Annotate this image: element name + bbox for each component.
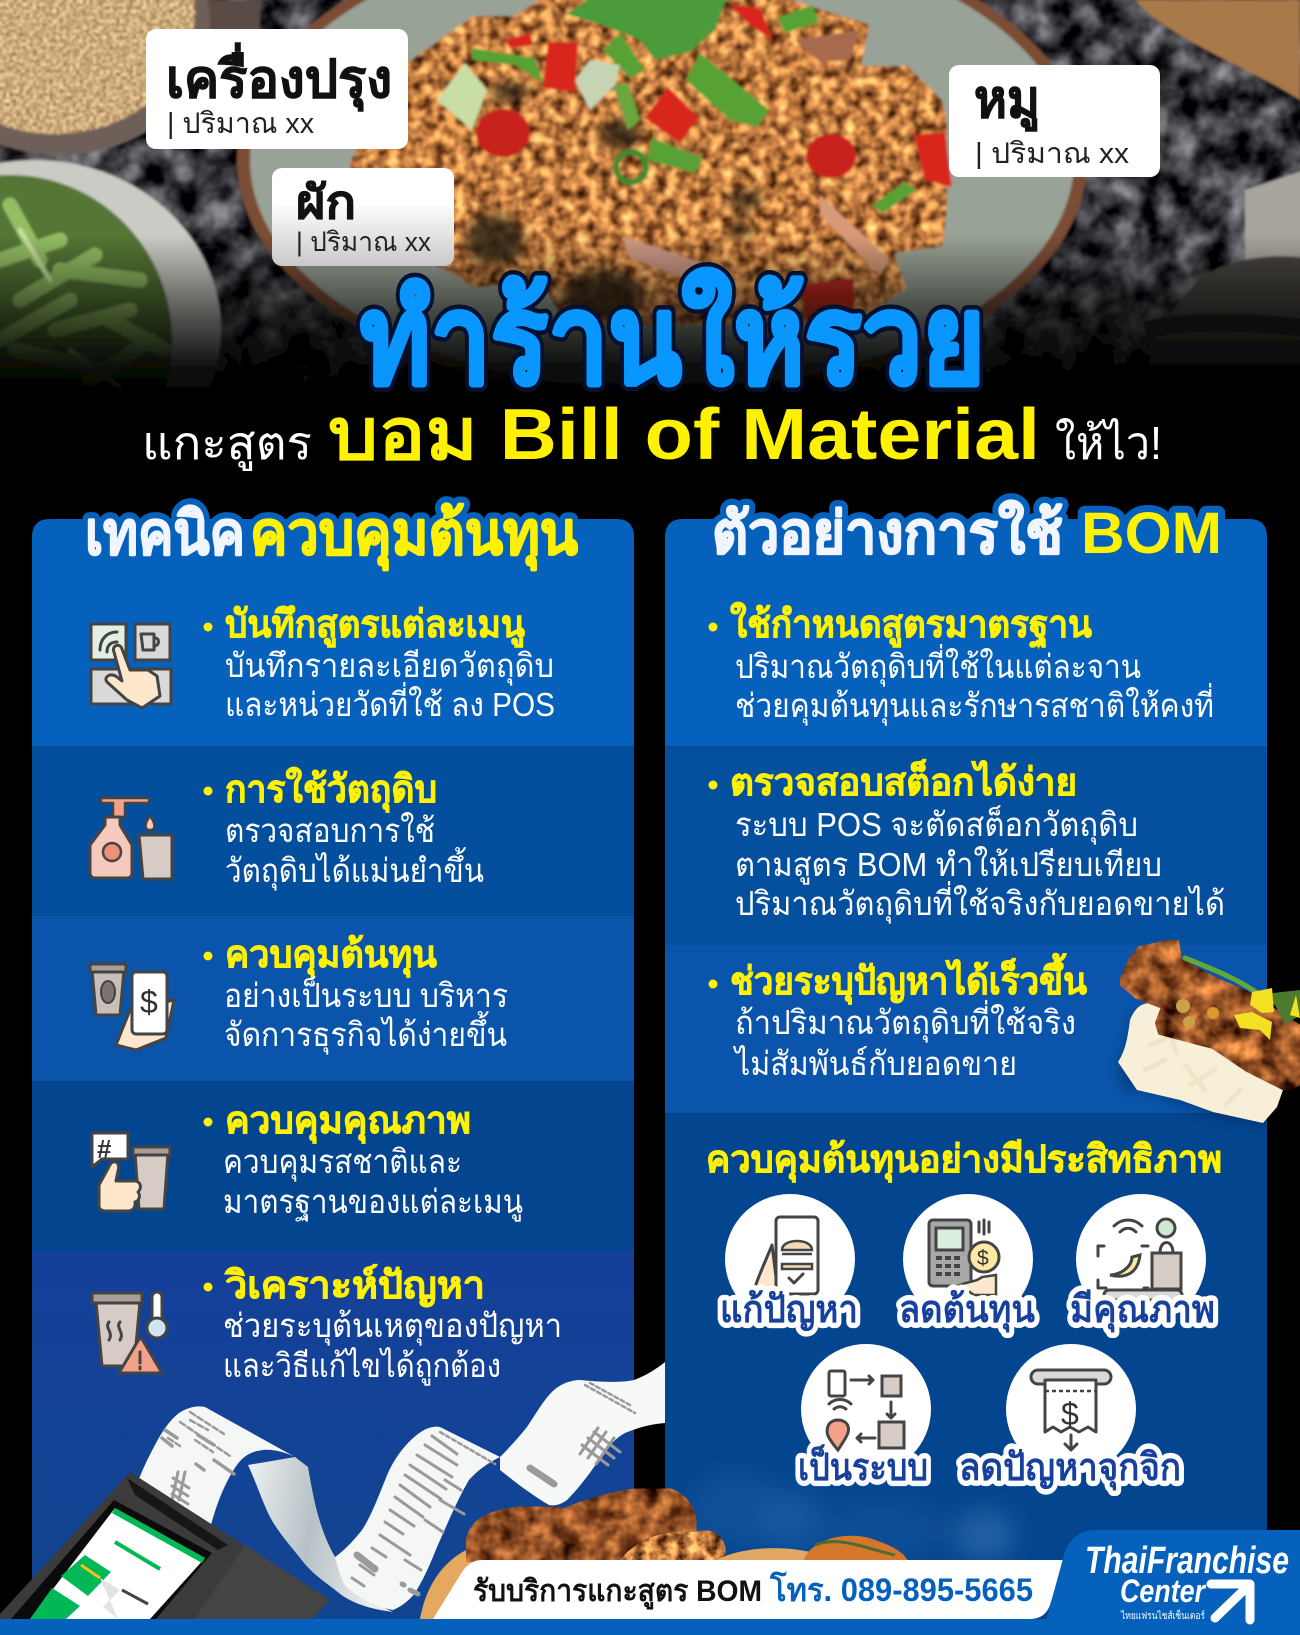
item: record recipes: บันทึกรายละเอียดวัตถุดิบ: [225, 647, 554, 686]
hero food photo: [0, 0, 1300, 388]
icon: thumbs up and cup: [92, 1133, 170, 1211]
subtitle: บอม Bill of Material: [328, 395, 1040, 475]
item: ingredient usage: ตรวจสอบการใช้: [225, 812, 435, 849]
lettuce: [566, 0, 728, 60]
item: ingredient usage: วัตถุดิบได้แม่นยำขึ้น: [225, 847, 484, 891]
item: identify problems faster: ถ้าปริมาณวัตถุดิบที่ใช้จริง: [735, 1000, 1076, 1043]
right heading: [712, 499, 1222, 566]
right heading: ตัวอย่างการใช้: [712, 499, 1063, 566]
ingredient label: pork: | ปริมาณ xx: [975, 138, 1130, 170]
item: cost control: ควบคุมต้นทุน: [225, 934, 437, 978]
item: problem analysis: และวิธีแก้ไขได้ถูกต้อง: [223, 1347, 501, 1386]
benefit: reduce costs: ลดต้นทุน: [899, 1289, 1035, 1333]
item: quality control: ควบคุมรสชาติและ: [223, 1143, 462, 1182]
subtitle: ให้ไว!: [1055, 417, 1162, 469]
ingredient label: pork: หมู: [974, 71, 1040, 132]
item: problem analysis: [92, 1264, 562, 1386]
ingredient label: seasoning: [146, 29, 408, 149]
icon: payment terminal with coin: $: [977, 1247, 989, 1270]
icon: logo arrow: [1211, 1584, 1250, 1620]
benefit: reduce small problems: ลดปัญหาจุกจิก: [959, 1447, 1181, 1491]
POS payment terminal: [0, 1472, 330, 1619]
ingredient label: seasoning: เครื่องปรุง: [166, 43, 392, 112]
dark gaps in meat: [465, 82, 763, 320]
item: standard recipe: ปริมาณวัตถุดิบที่ใช้ในแต่ละจาน: [735, 644, 1141, 687]
item: identify problems faster: [708, 953, 1087, 1082]
minced pork: [350, 0, 947, 325]
left heading: เทคนิค: [85, 500, 245, 567]
item: easy stock check: ตรวจสอบสต็อกได้ง่าย: [730, 759, 1077, 804]
logo: ThaiFranchise Center: [1042, 1530, 1300, 1635]
bullet: [204, 786, 212, 796]
right heading: BOM: [1081, 501, 1222, 566]
panel background rows: [32, 519, 634, 1619]
bowl of ground rice: [0, 0, 260, 155]
benefit: reduce small problems: [959, 1344, 1181, 1491]
photo: pork on sticky rice: [1118, 940, 1300, 1124]
left heading: เทคนิค: [85, 500, 245, 567]
icon: coffee cup and phone payment: $: [140, 984, 158, 1020]
benefit: quality: มีคุณภาพ: [1070, 1289, 1215, 1333]
pepper shaker right: [1140, 165, 1300, 425]
benefit: solve problems: [720, 1194, 858, 1331]
pink onion slices: [622, 30, 890, 280]
item: record recipes: บันทึกสูตรแต่ละเมนู: [225, 604, 525, 648]
item: standard recipe: ช่วยคุมต้นทุนและรักษารสชาติให้คงที่: [735, 683, 1214, 726]
right heading: BOM: [1081, 501, 1222, 566]
benefit: quality: [1070, 1194, 1215, 1333]
item: identify problems faster: ช่วยระบุปัญหาได้เร็วขึ้น: [730, 953, 1087, 1005]
subtitle: แกะสูตร: [142, 417, 312, 471]
main title: ทำร้านให้รวย: [360, 269, 985, 410]
item: standard recipe: ใช้กำหนดสูตรมาตรฐาน: [730, 602, 1092, 649]
icon: receipt from slot: $: [1061, 1396, 1079, 1432]
bullet: [204, 1282, 212, 1292]
left heading: [85, 500, 578, 571]
ingredient label: vegetable: | ปริมาณ xx: [296, 227, 431, 257]
logo: ThaiFranchise Center: ไทยแฟรนไชส์เซ็นเตอร์: [1120, 1608, 1206, 1622]
photo: grilled chicken at bottom: [420, 1489, 908, 1619]
item: ingredient usage: การใช้วัตถุดิบ: [225, 767, 437, 813]
plate: [237, 0, 1087, 400]
bullet: [204, 952, 212, 960]
wooden object top right: [1135, 0, 1300, 100]
blue footer bar: [0, 1619, 1300, 1635]
item: cost control: จัดการธุรกิจได้ง่ายขึ้น: [224, 1011, 507, 1055]
icon: coffee cup and phone payment: [90, 964, 174, 1050]
icon: syrup bottle and glass: [90, 798, 172, 879]
contact banner: [433, 1560, 1064, 1619]
ingredient label: vegetable: ผัก: [296, 176, 356, 228]
subheading: efficient cost control: ควบคุมต้นทุนอย่างมีประสิทธิภาพ: [706, 1139, 1222, 1183]
item: easy stock check: [708, 759, 1225, 924]
item: quality control: [92, 1100, 523, 1222]
ingredient label: pork: [949, 65, 1160, 177]
item: identify problems faster: ไม่สัมพันธ์กับยอดขาย: [732, 1045, 1017, 1082]
receipt front band: [335, 1427, 500, 1610]
faded food at bottom of right panel: [685, 1470, 1015, 1565]
item: cost control: [90, 934, 508, 1055]
icon: hot cup with warning: [92, 1292, 167, 1373]
item: easy stock check: ตามสูตร BOM ทำให้เปรียบเทียบ: [735, 846, 1162, 885]
receipt ribbon: [136, 1362, 665, 1612]
item: quality control: ควบคุมคุณภาพ: [225, 1100, 471, 1144]
red chillies: [476, 5, 952, 325]
icon: receipt from slot: [1031, 1370, 1111, 1450]
icon: touch menu: [91, 624, 171, 708]
icon: scan conveyor: [1098, 1219, 1182, 1300]
spring onion pieces: [437, 5, 916, 213]
bullet: [204, 1118, 212, 1126]
benefit: solve problems: แก้ปัญหา: [720, 1289, 858, 1331]
ingredient label: vegetable: [272, 168, 454, 266]
bullet: [708, 980, 718, 988]
item: standard recipe: [708, 602, 1214, 726]
benefit: systematic: [798, 1344, 931, 1489]
benefit: systematic: เป็นระบบ: [798, 1444, 928, 1489]
icon: phone with burger: [750, 1217, 818, 1309]
receipt first band: [136, 1406, 295, 1535]
icon: thumbs up and cup: #: [97, 1134, 112, 1164]
left heading: ควบคุมต้นทุน: [250, 500, 578, 571]
blackening overlay: [0, 235, 1300, 400]
subtitle: [142, 395, 1162, 475]
item: easy stock check: ระบบ POS จะตัดสต็อกวัตถุดิบ: [735, 805, 1138, 845]
contact banner: รับบริการแกะสูตร BOM: [473, 1575, 762, 1610]
benefit: reduce costs: [899, 1194, 1035, 1333]
receipt last band: [500, 1362, 665, 1505]
receipt fold: [248, 1457, 393, 1612]
panel: cost control techniques: [32, 500, 634, 1619]
icon: delivery flow: [827, 1371, 904, 1450]
right heading: ตัวอย่างการใช้: [712, 499, 1063, 566]
item: problem analysis: วิเคราะห์ปัญหา: [224, 1264, 485, 1307]
item: easy stock check: ปริมาณวัตถุดิบที่ใช้จริงกับยอดขายได้: [735, 881, 1225, 924]
left heading: ควบคุมต้นทุน: [250, 500, 578, 571]
item: record recipes: และหน่วยวัดที่ใช้ ลง POS: [225, 682, 555, 723]
item: record recipes: [91, 604, 555, 723]
logo: ThaiFranchise Center: Center: [1120, 1573, 1206, 1609]
bullet: [204, 622, 212, 632]
item: ingredient usage: [90, 767, 484, 891]
receipt print marks: [143, 1383, 635, 1594]
ingredient label: seasoning: | ปริมาณ xx: [167, 108, 314, 140]
bowl of spring onion: [0, 160, 221, 505]
item: problem analysis: ช่วยระบุต้นเหตุของปัญหา: [223, 1307, 562, 1346]
item: cost control: อย่างเป็นระบบ บริหาร: [224, 976, 508, 1014]
bullet: [708, 622, 718, 632]
bullet: [708, 780, 718, 790]
contact banner: โทร. 089-895-5665: [769, 1571, 1033, 1608]
main title: ทำร้านให้รวย: [360, 269, 985, 410]
panel background rows: [665, 519, 1267, 1619]
panel: BOM usage examples: [665, 499, 1300, 1619]
item: quality control: มาตรฐานของแต่ละเมนู: [223, 1183, 523, 1222]
